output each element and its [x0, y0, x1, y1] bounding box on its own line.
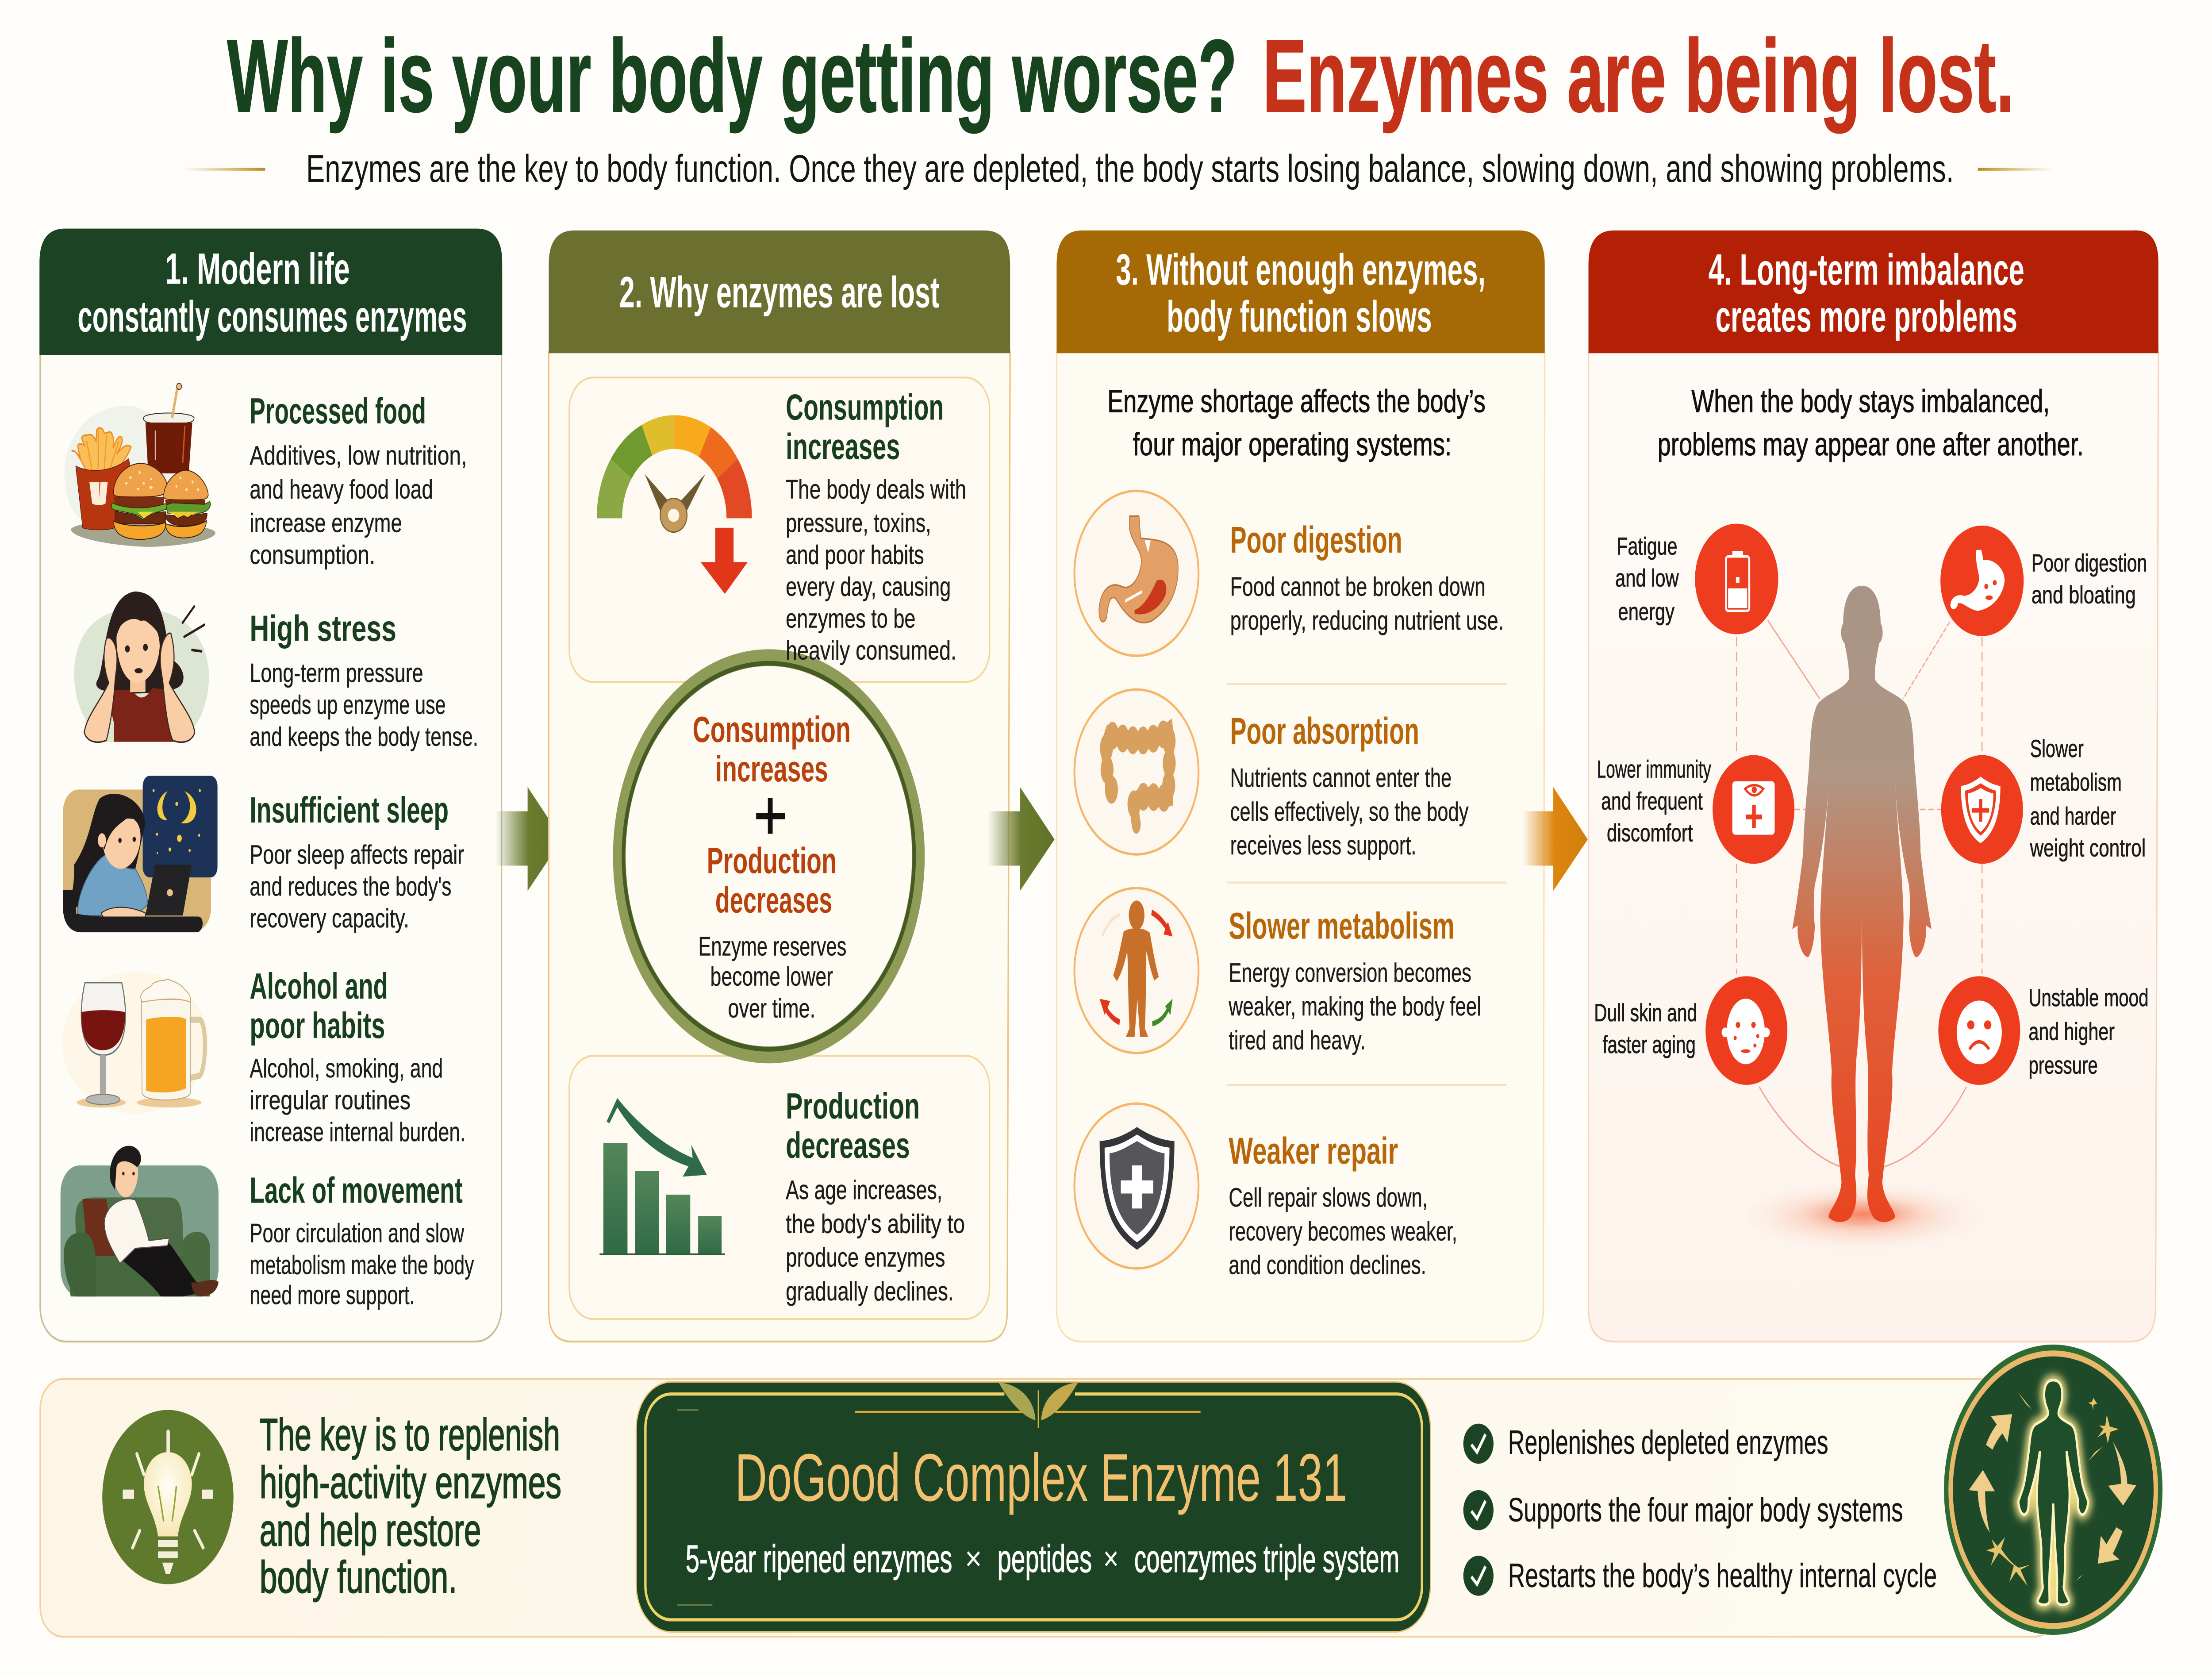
problem: unstable mood: pressure [2028, 1052, 2098, 1079]
row: weaker repair [1075, 1103, 1457, 1280]
product tagline: peptides [997, 1538, 1092, 1580]
product tagline [686, 1538, 1399, 1580]
problem: fatigue: Fatigue [1617, 533, 1677, 560]
production text: the body's ability to [786, 1209, 965, 1239]
central circle callout: decreases [715, 880, 832, 920]
benefit: replenishes: Replenishes depleted enzymes [1508, 1424, 1828, 1461]
icon: body with cycle arrows [1075, 888, 1198, 1053]
product tagline: coenzymes triple system [1134, 1538, 1399, 1580]
arrow: panel 1 to panel 2 [495, 787, 562, 891]
problem: slower metabolism: metabolism [2030, 769, 2122, 796]
item: lack of movement: Poor circulation and slow [250, 1219, 465, 1248]
icon: fast food [64, 383, 215, 547]
consumption text [786, 387, 966, 665]
problem: dull skin: Dull skin and [1594, 999, 1697, 1026]
item: lack of movement: need more support. [250, 1280, 415, 1310]
card: production decreases [569, 1056, 990, 1319]
panel 4 lead text: When the body stays imbalanced, [1691, 383, 2050, 419]
key message [260, 1410, 561, 1603]
poor digestion text: properly, reducing nutrient use. [1230, 606, 1504, 635]
panel 1: modern life [39, 229, 502, 1342]
problem: slower metabolism [1941, 735, 2146, 864]
arrow: panel 3 to panel 4 [1522, 787, 1588, 891]
problem: poor digestion and bloating [1940, 526, 2147, 636]
icon: gauge with down arrow [597, 415, 752, 594]
weaker repair text: Weaker repair [1229, 1130, 1398, 1172]
consumption text: every day, causing [786, 573, 951, 602]
panel 3 header: 3. Without enough enzymes, [1116, 245, 1486, 294]
problem: fatigue: and low [1615, 565, 1679, 592]
icon: light bulb [102, 1410, 234, 1584]
row: slower metabolism [1075, 888, 1481, 1055]
item: lack of movement [250, 1170, 474, 1310]
benefit: supports: Supports the four major body systems [1508, 1491, 1903, 1529]
title [227, 18, 2015, 134]
icon: shield [1075, 1103, 1198, 1269]
item: alcohol and poor habits: increase internal burden. [250, 1118, 465, 1147]
central circle callout: over time. [728, 994, 815, 1023]
slower metabolism text: Energy conversion becomes [1229, 958, 1471, 988]
problem: slower metabolism: weight control [2030, 834, 2146, 862]
poor absorption text: receives less support. [1230, 831, 1417, 861]
production text: As age increases, [786, 1176, 942, 1205]
central circle callout: become lower [710, 962, 833, 992]
consumption text: heavily consumed. [786, 636, 956, 665]
central circle callout: Enzyme reserves [698, 932, 846, 961]
figure outline [2018, 1380, 2088, 1605]
row: poor absorption [1075, 689, 1469, 861]
cycle arrows [1969, 1414, 2136, 1564]
panel 2: why enzymes are lost [549, 231, 1010, 1342]
production text: produce enzymes [786, 1243, 945, 1272]
item: lack of movement: Lack of movement [250, 1170, 463, 1211]
panel 4 lead text [1658, 383, 2084, 462]
product name: DoGood Complex Enzyme 131 [735, 1440, 1347, 1515]
key message: The key is to replenish [260, 1410, 560, 1460]
problem: unstable mood: and higher [2028, 1018, 2115, 1046]
item: processed food: Additives, low nutrition, [250, 441, 467, 471]
foot glow [1742, 1182, 1982, 1250]
problem: lower immunity: discomfort [1607, 819, 1693, 847]
panel 2 header [549, 231, 1010, 353]
panel 3 lead text [1107, 383, 1486, 462]
arrow: panel 2 to panel 3 [987, 787, 1055, 891]
icon: person awake late at laptop [63, 776, 218, 932]
product tagline: 5-year ripened enzymes [686, 1538, 952, 1580]
problem: fatigue: energy [1618, 598, 1674, 626]
bottom banner [40, 1379, 2058, 1637]
slower metabolism text: weaker, making the body feel [1229, 992, 1481, 1022]
product plaque [636, 1382, 1430, 1632]
production text: gradually declines. [786, 1277, 954, 1306]
problem: poor digestion and bloating: Poor digestion [2032, 550, 2147, 577]
slower metabolism text [1229, 905, 1481, 1055]
panel 3: body function slows [1056, 231, 1545, 1342]
item: processed food: increase enzyme [250, 509, 402, 538]
title: Why is your body getting worse? [227, 18, 1237, 134]
item: high stress: High stress [250, 608, 396, 649]
weaker repair text: recovery becomes weaker, [1229, 1217, 1457, 1246]
item: processed food [250, 391, 467, 570]
problem: lower immunity [1597, 755, 1794, 864]
item: high stress: Long-term pressure [250, 658, 423, 688]
problem: poor digestion and bloating: and bloating [2032, 581, 2136, 609]
consumption text: Consumption [786, 387, 944, 428]
panel 3 header [1056, 231, 1545, 353]
key message: high-activity enzymes [260, 1458, 561, 1508]
emblem: glowing body with cycle arrows [1943, 1344, 2163, 1635]
weaker repair text: Cell repair slows down, [1229, 1183, 1428, 1213]
poor digestion text: Poor digestion [1230, 519, 1402, 561]
consumption text: and poor habits [786, 541, 924, 570]
panel 3 lead text: Enzyme shortage affects the body’s [1107, 383, 1486, 419]
central circle callout: Production [707, 841, 837, 881]
slower metabolism text: tired and heavy. [1229, 1026, 1366, 1055]
production text: decreases [786, 1126, 910, 1166]
poor absorption text: Nutrients cannot enter the [1230, 764, 1452, 793]
item: insufficient sleep: Poor sleep affects repair [250, 840, 464, 870]
problem: slower metabolism: and harder [2030, 803, 2116, 830]
production text [786, 1086, 965, 1306]
panel 1 header: 1. Modern life [165, 244, 350, 293]
problem: slower metabolism: Slower [2030, 735, 2084, 762]
item: insufficient sleep [250, 790, 464, 934]
card: consumption increases [569, 377, 990, 682]
consumption text: The body deals with [786, 475, 966, 504]
key message: body function. [260, 1553, 457, 1603]
panel 1 header [39, 229, 502, 355]
item: alcohol and poor habits: poor habits [250, 1006, 385, 1046]
product tagline: × [965, 1540, 982, 1578]
consumption text: pressure, toxins, [786, 509, 931, 538]
row: poor digestion [1075, 491, 1504, 656]
weaker repair text: and condition declines. [1229, 1251, 1426, 1280]
item: processed food: and heavy food load [250, 475, 433, 504]
icon: leaves [999, 1383, 1078, 1428]
poor digestion text [1230, 519, 1504, 635]
central circle callout: Consumption [693, 710, 851, 750]
item: insufficient sleep: and reduces the body's [250, 872, 451, 902]
icon: person on couch [61, 1146, 219, 1296]
problem: unstable mood: Unstable mood [2028, 984, 2149, 1011]
problem: dull skin [1594, 976, 1787, 1085]
icon: stomach [1075, 491, 1198, 656]
central circle callout [613, 649, 925, 1063]
consumption text: enzymes to be [786, 604, 916, 634]
panel 4 header: creates more problems [1716, 292, 2017, 341]
key message: and help restore [260, 1506, 481, 1556]
item: processed food: consumption. [250, 541, 375, 570]
poor absorption text: cells effectively, so the body [1230, 797, 1469, 826]
human figure [1792, 586, 1932, 1222]
production text: Production [786, 1086, 920, 1126]
subtitle with gold rules: Enzymes are the key to body function. Once they are depleted, the body starts losing balance, slowing down, and showing problems. [306, 147, 1954, 190]
panel 4 header [1589, 231, 2158, 353]
problem: lower immunity: and frequent [1601, 788, 1703, 815]
panel 3 lead text: four major operating systems: [1133, 427, 1452, 462]
poor absorption text: Poor absorption [1230, 710, 1419, 752]
item: alcohol and poor habits [250, 966, 465, 1147]
benefit: restarts: Restarts the body’s healthy internal cycle [1508, 1557, 1937, 1595]
item: alcohol and poor habits: irregular routines [250, 1086, 411, 1115]
consumption text: increases [786, 427, 900, 467]
item: processed food: Processed food [250, 391, 426, 431]
central circle callout: increases [715, 749, 828, 789]
panel 4 lead text: problems may appear one after another. [1658, 427, 2084, 462]
panel 4 header: 4. Long-term imbalance [1709, 245, 2024, 294]
problem: fatigue [1615, 524, 1778, 634]
panel 4: long-term imbalance [1589, 231, 2158, 1342]
item: lack of movement: metabolism make the body [250, 1251, 474, 1280]
icon: intestines [1075, 689, 1198, 854]
icon: falling bar chart [599, 1098, 725, 1254]
problem: dull skin: faster aging [1602, 1031, 1696, 1058]
problem: unstable mood [1938, 976, 2149, 1085]
title: Enzymes are being lost. [1263, 18, 2015, 134]
item: insufficient sleep: Insufficient sleep [250, 790, 449, 830]
item: alcohol and poor habits: Alcohol, smoking, and [250, 1054, 443, 1084]
connector lines [1736, 620, 1982, 1167]
panel 2 header: 2. Why enzymes are lost [619, 267, 940, 317]
poor absorption text [1230, 710, 1469, 861]
icon: wine and beer [62, 972, 208, 1114]
product tagline: × [1103, 1540, 1119, 1578]
item: high stress [250, 608, 478, 752]
poor digestion text: Food cannot be broken down [1230, 573, 1486, 602]
glow layer [2018, 1380, 2088, 1605]
weaker repair text [1229, 1130, 1457, 1280]
item: high stress: speeds up enzyme use [250, 690, 446, 720]
problem: lower immunity: Lower immunity [1597, 756, 1711, 783]
item: alcohol and poor habits: Alcohol and [250, 966, 388, 1007]
item: high stress: and keeps the body tense. [250, 722, 478, 752]
item: insufficient sleep: recovery capacity. [250, 904, 409, 934]
slower metabolism text: Slower metabolism [1229, 905, 1455, 947]
panel 1 header: constantly consumes enzymes [77, 292, 467, 341]
panel 3 header: body function slows [1167, 292, 1432, 341]
sparkles [1986, 1392, 2119, 1586]
icon: stressed woman [74, 592, 209, 742]
